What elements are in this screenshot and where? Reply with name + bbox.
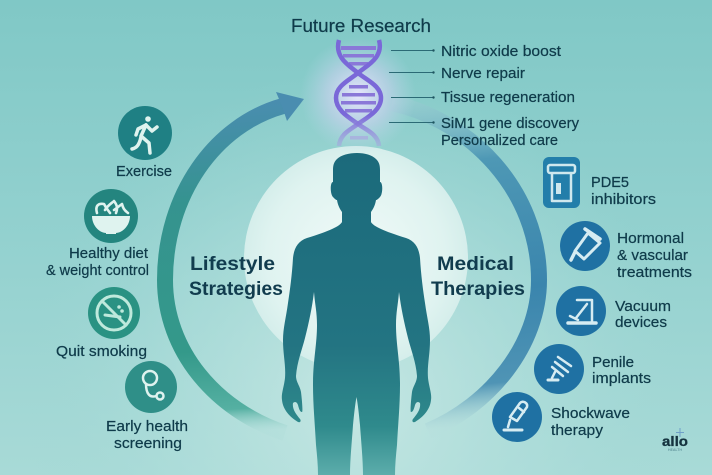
heading: medical therapies: Therapies bbox=[431, 279, 525, 300]
item: shockwave therapy: Shockwave bbox=[551, 406, 630, 422]
icon: syringe bbox=[571, 229, 600, 260]
arc: lifestyle arrow bbox=[165, 92, 304, 433]
logo: allo health bbox=[662, 428, 688, 452]
dna rungs bbox=[341, 46, 376, 140]
item: early screening bbox=[106, 361, 188, 452]
glow circle behind figure bbox=[244, 146, 468, 370]
icon: shockwave wand bbox=[504, 402, 527, 430]
research list: Tissue regeneration bbox=[441, 90, 575, 106]
research list: Nitric oxide boost bbox=[441, 44, 561, 60]
item: healthy diet bbox=[46, 189, 149, 279]
dna helix bbox=[300, 37, 416, 153]
item: pde5 inhibitors: PDE5 bbox=[591, 175, 629, 191]
heading: lifestyle strategies: Strategies bbox=[189, 279, 283, 300]
research list: Nerve repair bbox=[441, 66, 525, 82]
item: shockwave therapy: therapy bbox=[551, 423, 604, 439]
icon: no smoking bbox=[97, 296, 131, 330]
logo: allo health: allo bbox=[662, 433, 688, 449]
icon: runner bbox=[132, 116, 157, 153]
item: shockwave therapy bbox=[492, 392, 630, 442]
item: hormonal and vascular treatments: treatments bbox=[617, 265, 692, 281]
item: quit smoking: Quit smoking bbox=[56, 344, 147, 360]
arc: medical therapies bbox=[392, 103, 539, 431]
dna glow bbox=[300, 37, 416, 153]
item: hormonal and vascular treatments bbox=[560, 221, 692, 281]
item: healthy diet: & weight control bbox=[46, 263, 149, 279]
item: vacuum devices: Vacuum bbox=[615, 299, 671, 315]
icon: implant bbox=[548, 357, 571, 380]
icon: salad bowl bbox=[92, 201, 130, 234]
item: vacuum devices: devices bbox=[615, 315, 667, 331]
item: hormonal and vascular treatments: & vascular bbox=[617, 248, 688, 264]
research list bbox=[389, 44, 580, 149]
heading: lifestyle strategies: Lifestyle bbox=[190, 254, 275, 275]
heading: medical therapies: Medical bbox=[437, 254, 514, 275]
icon: pill bottle bbox=[548, 165, 575, 201]
icon: stethoscope bbox=[143, 371, 164, 400]
item: quit smoking bbox=[56, 287, 147, 360]
item: pde5 inhibitors: inhibitors bbox=[591, 192, 656, 208]
logo: allo health: HEALTH bbox=[668, 448, 682, 452]
research list: Personalized care bbox=[441, 133, 558, 149]
research list: SiM1 gene discovery bbox=[441, 116, 580, 132]
title: future research: Future Research bbox=[291, 16, 431, 36]
item: exercise bbox=[116, 106, 172, 180]
item: vacuum devices bbox=[556, 286, 671, 336]
dna strands bbox=[338, 40, 381, 146]
item: early screening: Early health bbox=[106, 419, 188, 435]
item: penile implants bbox=[534, 344, 651, 394]
item: hormonal and vascular treatments: Hormonal bbox=[617, 231, 684, 247]
item: exercise: Exercise bbox=[116, 164, 172, 180]
heading: lifestyle strategies bbox=[189, 254, 283, 300]
heading: medical therapies bbox=[431, 254, 525, 300]
figure silhouette bbox=[282, 153, 431, 475]
item: pde5 inhibitors bbox=[543, 157, 656, 208]
icon: vacuum device bbox=[568, 300, 596, 323]
item: early screening: screening bbox=[114, 436, 182, 452]
item: penile implants: Penile bbox=[592, 355, 634, 371]
item: healthy diet: Healthy diet bbox=[69, 246, 148, 262]
item: penile implants: implants bbox=[592, 371, 651, 387]
